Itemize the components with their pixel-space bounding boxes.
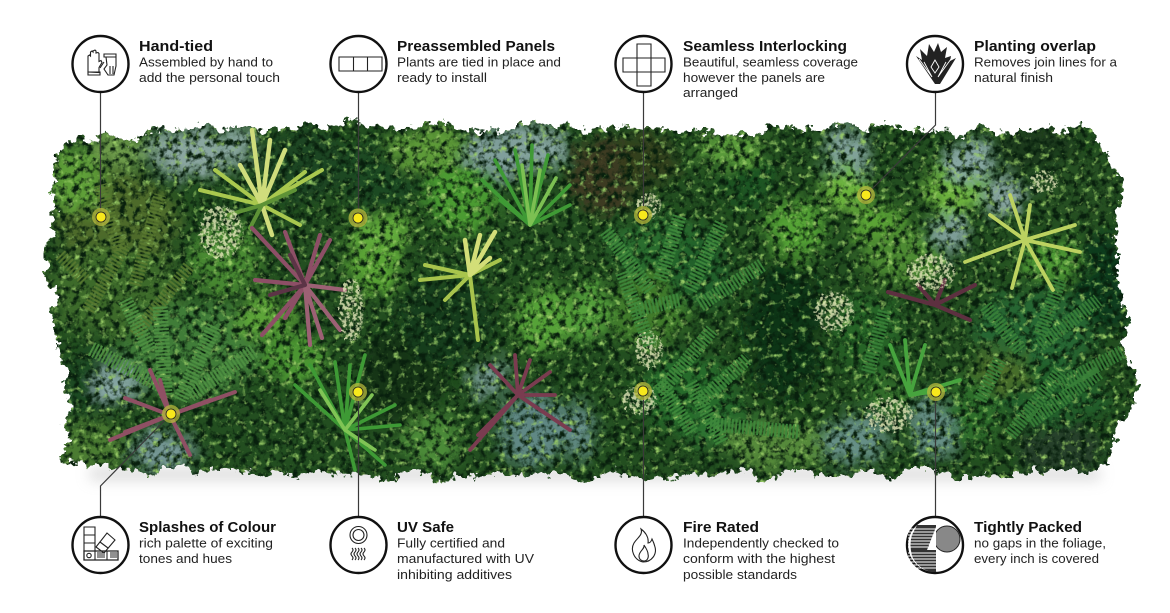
yellow marker dots xyxy=(92,186,945,423)
description: Assembled by hand to xyxy=(139,54,273,70)
icon: three panels xyxy=(330,36,386,92)
description: Independently checked to xyxy=(683,536,839,550)
description: add the personal touch xyxy=(139,70,280,85)
description: no gaps in the foliage, xyxy=(974,536,1106,550)
description: every inch is covered xyxy=(974,551,1099,566)
icon: colour swatches xyxy=(72,517,128,573)
feature: Hand-tied xyxy=(72,36,280,92)
icon: cross of panels xyxy=(616,36,672,92)
fern fronds: green lower left xyxy=(90,300,255,400)
leader lines xyxy=(100,93,936,517)
icon: sun rings and heat waves xyxy=(330,517,386,573)
description: natural finish xyxy=(974,70,1053,85)
description: rich palette of exciting xyxy=(139,536,273,550)
plant: green spiky top centre xyxy=(482,145,570,225)
fern fronds: right xyxy=(868,280,1122,435)
plant: green spiky lower left xyxy=(295,355,400,470)
heading: Splashes of Colour xyxy=(139,520,276,536)
fern fronds: centre xyxy=(605,215,800,442)
heading: Tightly Packed xyxy=(974,520,1082,536)
plant: yellow spiky centre xyxy=(420,232,500,340)
wall floor shadow xyxy=(90,468,1100,480)
plant: purple spiky lower left xyxy=(110,370,235,455)
description: inhibiting additives xyxy=(397,567,513,582)
plant: purple spiky centre left xyxy=(252,228,345,345)
description: tones and hues xyxy=(139,551,233,566)
fern fronds: olive upper left xyxy=(60,185,190,335)
feature: Tightly Packed xyxy=(907,517,1106,573)
heading: Preassembled Panels xyxy=(397,39,555,55)
plant: purple spiky lower centre xyxy=(470,355,570,450)
description: Beautiful, seamless coverage xyxy=(683,54,858,70)
feature: Seamless Interlocking xyxy=(616,36,858,100)
description: arranged xyxy=(683,85,738,100)
foliage mass xyxy=(30,110,1150,490)
description: Fully certified and xyxy=(397,536,505,550)
icon: packed shapes xyxy=(907,517,963,573)
feature: Splashes of Colour xyxy=(72,517,276,573)
heading: Hand-tied xyxy=(139,39,213,55)
description: however the panels are xyxy=(683,70,825,85)
description: conform with the highest xyxy=(683,551,835,566)
heading: Seamless Interlocking xyxy=(683,39,847,55)
icon: flame xyxy=(616,517,672,573)
feature: Fire Rated xyxy=(616,517,839,582)
description: possible standards xyxy=(683,567,798,582)
heading: Fire Rated xyxy=(683,520,759,536)
description: ready to install xyxy=(397,70,487,85)
heading: Planting overlap xyxy=(974,39,1096,55)
plant: yellow spiky right xyxy=(965,195,1080,290)
icon: hands xyxy=(72,36,128,92)
plant: dark purple spiky right xyxy=(888,280,975,320)
feature: Planting overlap xyxy=(907,36,1118,92)
feature: UV Safe xyxy=(330,517,534,582)
description: manufactured with UV xyxy=(397,551,534,566)
description: Removes join lines for a xyxy=(974,54,1118,70)
heading: UV Safe xyxy=(397,520,454,536)
icon: spiky plant xyxy=(907,36,963,92)
plant wall xyxy=(30,110,1150,490)
description: Plants are tied in place and xyxy=(397,54,561,70)
plant: yellow spiky top left xyxy=(200,130,322,235)
plant: green blades lower right xyxy=(890,340,960,395)
feature: Preassembled Panels xyxy=(330,36,561,92)
white flower clusters xyxy=(200,172,1059,432)
